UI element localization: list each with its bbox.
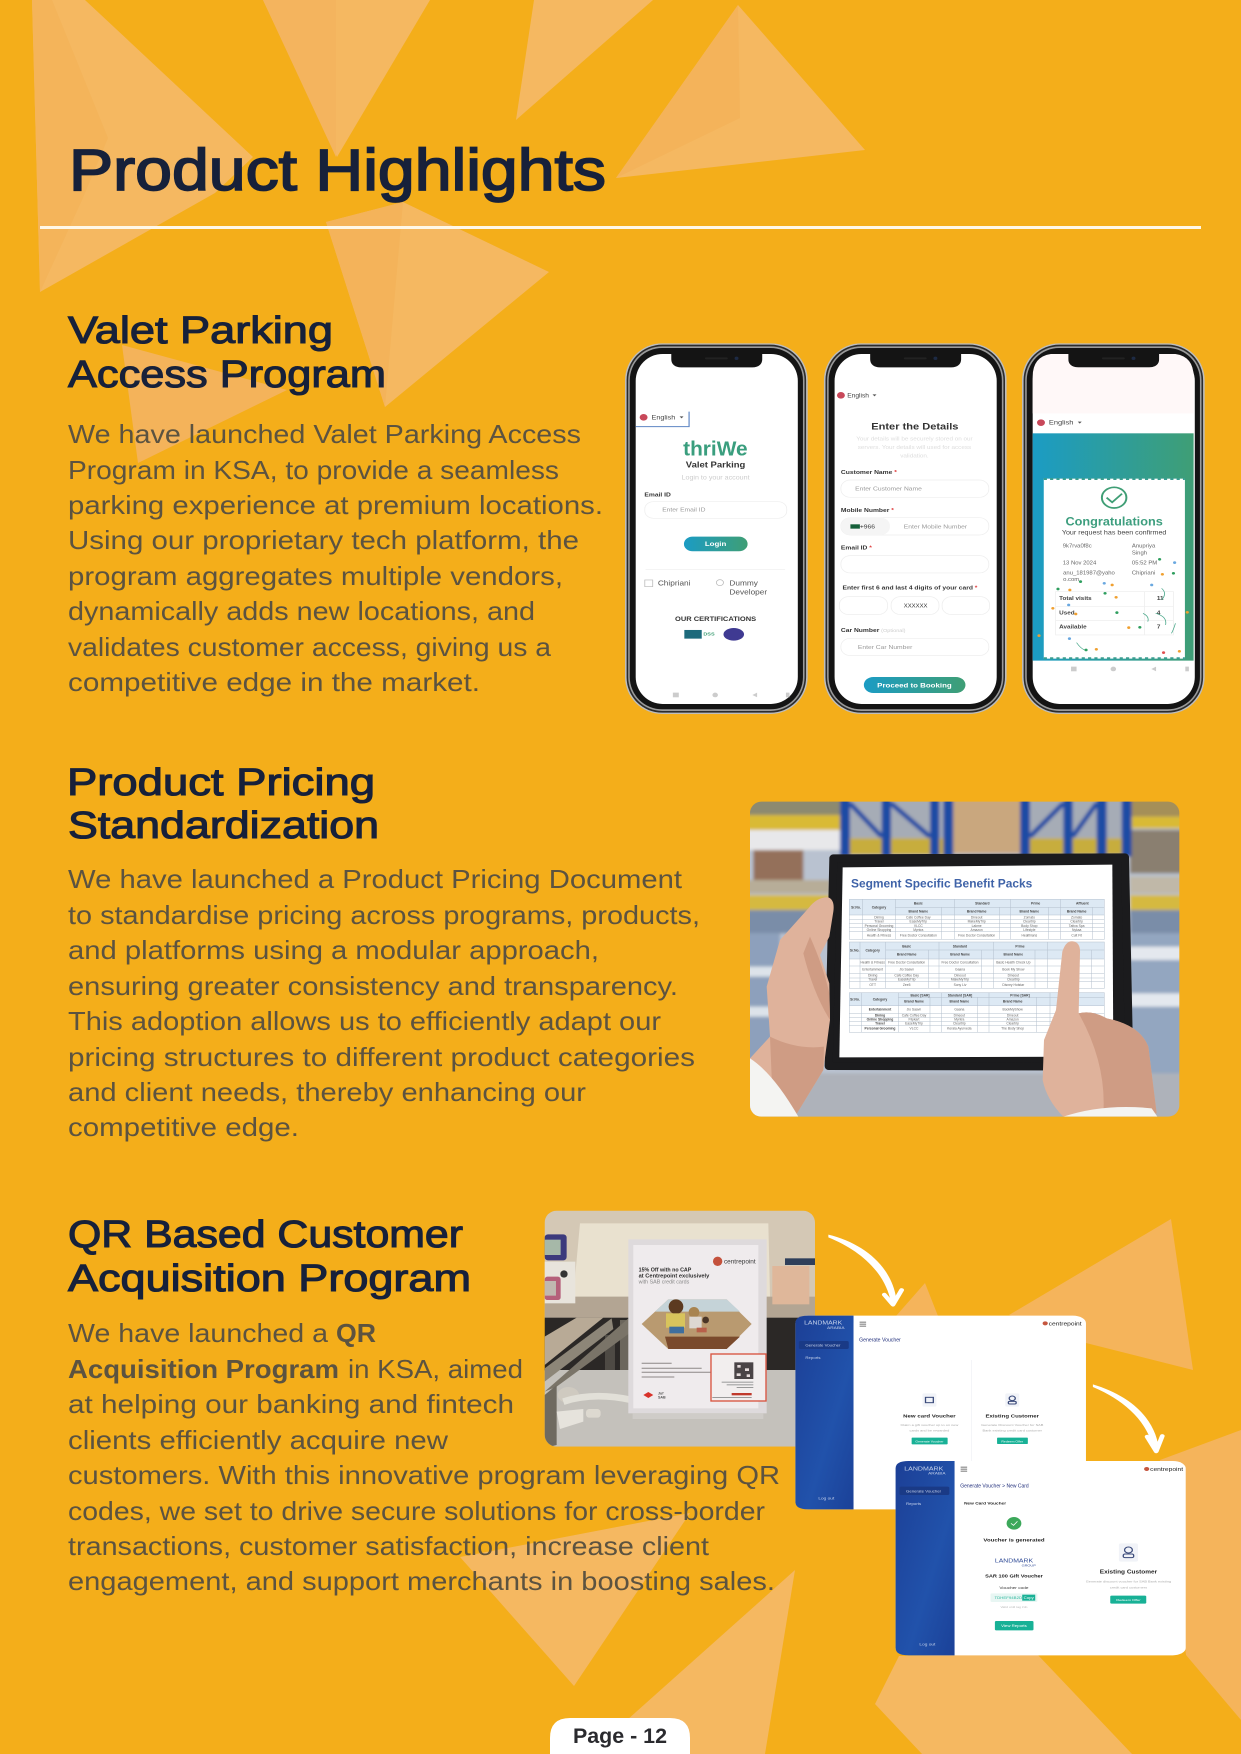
- pricing table 3: Basic [SAR]: [910, 993, 930, 997]
- pricing table 1: Online Shopping: [867, 928, 891, 932]
- pricing table 2: Brand Name: [897, 953, 917, 957]
- heading: pricing: Standardization: [68, 805, 379, 847]
- pricing table 1: Affluent: [1076, 901, 1090, 905]
- QR code callout: [711, 1354, 766, 1401]
- body text: valet parking: [68, 419, 603, 697]
- page number pill: Page - 12: [573, 1725, 667, 1748]
- photo: QR standee in store: with SAB credit cards: [639, 1279, 690, 1285]
- phone 2: enter details form: Email ID *: [841, 545, 872, 551]
- left hand: [750, 897, 834, 1117]
- heading: pricing: [67, 762, 379, 847]
- card: new card voucher: Claim a gift voucher up to on new: [901, 1423, 959, 1427]
- pricing table 1: Travel: [874, 920, 884, 924]
- card: new card voucher: Generate Voucher: [915, 1440, 943, 1443]
- confirmation ticket: anu_181987@yaho: [1063, 571, 1115, 576]
- body text: pricing: [68, 864, 700, 1142]
- pricing table 3: Brand Name: [950, 1000, 969, 1004]
- phone 2: enter details form: servers. Your details will used for access: [858, 445, 971, 451]
- pricing table 3: Brand Name: [1003, 1000, 1023, 1004]
- heading: valet parking: Access Program: [68, 354, 386, 396]
- phone 2: enter details form: Enter Customer Name: [855, 486, 922, 492]
- pricing table 1: Dineout: [971, 916, 982, 920]
- pricing table 2: Standard: [953, 944, 967, 948]
- pricing table 1: Cleartrip: [1023, 920, 1036, 924]
- phone 2: enter details form: Your details will be securely stored on our: [856, 437, 973, 442]
- body text: pricing: competitive edge.: [68, 1112, 299, 1142]
- app window: generate voucher: Generate Voucher: [805, 1344, 841, 1347]
- confirmation ticket: o.com: [1063, 577, 1080, 583]
- card: existing customer: [981, 1393, 1044, 1444]
- phone 1: login: [625, 343, 808, 714]
- confirmation ticket: 05:52 PM: [1132, 561, 1158, 566]
- body text: valet parking: We have launched Valet Parking Access: [68, 419, 581, 449]
- existing customer option: Redeem Offer: [1116, 1598, 1142, 1602]
- app window: generate voucher: LANDMARK: [804, 1320, 843, 1326]
- voucher result: TDHEF94B2D: [994, 1596, 1022, 1600]
- pricing table 1: Prime: [1031, 901, 1040, 905]
- app window: voucher generated: ARABIA: [928, 1471, 946, 1476]
- pricing table 1: Zomato: [1024, 916, 1035, 920]
- body text: QR: engagement, and support merchants in boosting sales.: [68, 1566, 775, 1596]
- pricing table 1: Brand Name: [909, 910, 928, 914]
- body text: pricing: to standardise pricing across programs, products,: [68, 900, 700, 930]
- body text: QR: clients efficiently acquire new: [68, 1425, 448, 1455]
- pricing table 3: Brand Name: [904, 1000, 924, 1004]
- phone 1: login: Chipriani: [658, 579, 691, 587]
- pricing table 1: Free Doctor Consultation: [900, 934, 937, 938]
- pricing table 1: Brand Name: [967, 910, 987, 914]
- arrow: photo to voucher screen: [828, 1235, 902, 1305]
- phone 1: login: Valet Parking: [686, 460, 745, 469]
- pricing table 1: Lakme: [972, 924, 982, 928]
- pricing table 1: Lifestyle: [1023, 928, 1036, 932]
- pricing table 1: Brand Name: [1067, 910, 1087, 914]
- pricing table 3: [849, 993, 1104, 1032]
- pricing table 3: Dineout: [1007, 1013, 1018, 1017]
- QR program visuals: [545, 1211, 1186, 1655]
- pricing table 2: Disney Hotstar: [1002, 983, 1025, 987]
- confirmation ticket: 11: [1157, 596, 1164, 602]
- phone 1: login: Login to your account: [682, 475, 750, 481]
- phone 2: enter details form: Enter first 6 and last 4 digits of your card *: [842, 585, 978, 591]
- app window: voucher generated: Reports: [906, 1502, 921, 1506]
- pricing table 2: Health & Fitness: [860, 960, 885, 964]
- existing customer option: [1086, 1543, 1171, 1604]
- app window: generate voucher: [795, 1316, 1086, 1509]
- confirmation ticket: Total visits: [1059, 596, 1093, 602]
- tablet device: [829, 857, 1129, 1067]
- pricing table 2: Gaana: [955, 968, 965, 972]
- heading: QR: [68, 1214, 471, 1300]
- body text: QR: [68, 1318, 780, 1596]
- pricing table 1: Body Shop: [1021, 924, 1038, 928]
- pricing table 2: Category: [865, 948, 880, 952]
- body text: valet parking: program aggregates multiple vendors,: [68, 561, 563, 591]
- pricing table 3: Prime [SAR]: [1010, 993, 1030, 997]
- confirmation ticket: Your request has been confirmed: [1062, 530, 1167, 536]
- pricing table 1: [849, 899, 1104, 939]
- pricing table 1: Zomato: [1071, 916, 1082, 920]
- app window: voucher generated: LANDMARK: [904, 1466, 944, 1472]
- body text: QR: codes, we set to drive secure solutions for cross-border: [68, 1496, 765, 1526]
- pricing table 1: Free Doctor Consultation: [958, 934, 995, 938]
- voucher result: Valid until tag info: [1000, 1605, 1028, 1609]
- section: pricing text: [67, 762, 700, 1142]
- card: existing customer: Existing Customer: [985, 1414, 1040, 1419]
- confirmation ticket: 4: [1157, 611, 1161, 616]
- body text: pricing: ensuring greater consistency and transparency.: [68, 971, 678, 1001]
- photo: QR standee in store: at Centrepoint exclusively: [639, 1274, 709, 1280]
- pricing table 3: Cleartrip: [1006, 1021, 1019, 1025]
- phone 2: enter details form: Mobile Number *: [841, 507, 894, 514]
- body text: valet parking: competitive edge in the market.: [68, 667, 480, 697]
- pricing table 3: BookMyShow: [1002, 1007, 1023, 1011]
- voucher result: View Reports: [1001, 1624, 1027, 1628]
- pricing table 1: Myntra: [913, 928, 924, 932]
- pricing table 2: Jio Saavn: [899, 968, 914, 972]
- pricing table 2: Basic Health Check Up: [996, 960, 1031, 964]
- title rule: [40, 226, 1201, 229]
- card: new card voucher: [901, 1393, 959, 1444]
- warehouse background: [743, 797, 1187, 1123]
- pricing table 2: Zee5: [903, 983, 911, 987]
- pricing table 2: Sony Liv: [954, 983, 967, 987]
- pricing table 3: Flipkart: [909, 1017, 920, 1021]
- phone mockups: [625, 343, 1205, 714]
- body text: QR: QR: [336, 1318, 376, 1348]
- body text: pricing: This adoption allows us to efficiently adapt our: [68, 1006, 661, 1036]
- confirmation ticket: Congratulations: [1066, 514, 1163, 528]
- body text: QR: transactions, customer satisfaction, increase client: [68, 1531, 710, 1561]
- heading: QR: Acquisition Program: [68, 1258, 471, 1300]
- phone 1: login: Login: [705, 540, 726, 548]
- title: Product Highlights: [69, 138, 606, 203]
- pricing table 2: MakeMyTrip: [951, 978, 969, 982]
- pricing table 2: Cleartrip: [1007, 978, 1020, 982]
- pricing table 1: Healthians: [1021, 934, 1038, 938]
- photo: QR standee in store: SAB: [658, 1395, 666, 1399]
- phone 1: login: OUR CERTIFICATIONS: [675, 616, 757, 623]
- confirmation ticket: Available: [1059, 625, 1087, 630]
- pricing table 2: Book My Show: [1002, 968, 1025, 972]
- phone 2: enter details form: Enter Mobile Number: [904, 524, 967, 530]
- pricing table 1: Sr.No.: [851, 906, 861, 910]
- heading: valet parking: Valet Parking: [68, 310, 333, 352]
- pricing table 1: Cafe Coffee Day: [906, 916, 931, 920]
- confirmation ticket: [1037, 479, 1189, 659]
- pricing table 2: Dining: [868, 974, 878, 978]
- pricing table 1: Brand Name: [1020, 910, 1039, 914]
- app window: voucher generated: Generate Voucher: [906, 1490, 942, 1493]
- phone 1: login: Dummy: [729, 579, 758, 587]
- body text: QR: at helping our banking and fintech: [68, 1389, 514, 1419]
- body text: QR: customers. With this innovative program leveraging QR: [68, 1460, 780, 1490]
- existing customer option: Existing Customer: [1100, 1570, 1158, 1575]
- pricing table 1: Dining: [874, 916, 884, 920]
- phone 2: enter details form: Car Number (Optional): [841, 627, 906, 634]
- app window: generate voucher: centrepoint: [1049, 1321, 1082, 1327]
- pricing table 2: Travel: [868, 978, 877, 982]
- body text: pricing: We have launched a Product Pricing Document: [68, 864, 683, 894]
- pricing table 3: Category: [873, 997, 887, 1001]
- pricing table 2: [849, 942, 1104, 988]
- confirmation ticket: 7: [1157, 625, 1160, 630]
- pricing table 3: Personal Grooming: [865, 1027, 895, 1031]
- pricing table 1: MakeMyTrip: [968, 920, 986, 924]
- app window: generate voucher: Generate Voucher: [859, 1338, 901, 1343]
- voucher result: Voucher code: [999, 1586, 1029, 1590]
- pricing table 3: Entertainment: [869, 1007, 892, 1011]
- pricing table 2: Brand Name: [1004, 953, 1023, 957]
- pricing table 1: Health & Fitness: [867, 934, 892, 938]
- pricing table 2: Sr.No.: [850, 948, 860, 952]
- voucher result: Voucher is generated: [983, 1538, 1045, 1543]
- body text: valet parking: validates customer access, giving us a: [68, 632, 552, 662]
- pricing table 1: VLCC: [914, 924, 923, 928]
- pricing table 1: Standard: [975, 901, 990, 905]
- voucher result: Copy: [1024, 1596, 1034, 1600]
- phone 1: login: Enter Email ID: [662, 507, 706, 513]
- phone 2: enter details form: Customer Name *: [841, 469, 897, 476]
- body text: valet parking: parking experience at premium locations.: [68, 490, 603, 520]
- photo: QR standee in store: Juf: [658, 1391, 664, 1395]
- pricing table 2: Dineout: [954, 974, 966, 978]
- app window: voucher generated: New Card Voucher: [964, 1501, 1007, 1505]
- section: QR text: [68, 1214, 780, 1596]
- phone 1: login: thriWe: [683, 437, 748, 460]
- confetti: [1037, 558, 1189, 654]
- body text: pricing: and platforms using a modular approach,: [68, 935, 599, 965]
- body text: pricing: pricing structures to different product categories: [68, 1042, 695, 1072]
- photo: QR standee in store: [545, 1211, 815, 1447]
- right hand pointing: [1043, 941, 1157, 1117]
- card: existing customer: Redeem Offer: [1001, 1440, 1023, 1443]
- card: new card voucher: cards and be rewarded: [910, 1429, 949, 1433]
- heading: QR: QR Based Customer: [68, 1214, 463, 1256]
- pricing table 3: Dineout: [954, 1013, 965, 1017]
- voucher result: GROUP: [1022, 1564, 1037, 1567]
- pricing table 1: Category: [872, 906, 886, 910]
- body text: valet parking: dynamically adds new locations, and: [68, 596, 535, 626]
- arrow: voucher screen to result screen: [1093, 1384, 1162, 1451]
- app window: voucher generated: Generate Voucher > New Card: [960, 1484, 1029, 1489]
- confirmation ticket: 9k7rva0f8c: [1063, 544, 1092, 549]
- phone 2: enter details form: XXXXXX: [904, 604, 928, 609]
- body text: valet parking: Program in KSA, to provide a seamless: [68, 455, 559, 485]
- card: existing customer: Bank existing credit card customer: [983, 1429, 1043, 1433]
- pricing table 3: Amazon: [1007, 1017, 1019, 1021]
- confirmation ticket: Chipriani: [1132, 571, 1155, 576]
- phone 1: login: DSS: [703, 632, 715, 637]
- pricing table 1: Cult Fit: [1071, 934, 1082, 938]
- card: new card voucher: New card Voucher: [903, 1414, 957, 1419]
- pricing table 3: Jio Saavn: [907, 1007, 921, 1011]
- app window: voucher generated: centrepoint: [1150, 1467, 1183, 1473]
- photo: QR standee in store: centrepoint: [724, 1259, 756, 1266]
- pricing table 3: Standard [SAR]: [948, 993, 972, 997]
- voucher result: LANDMARK: [995, 1558, 1034, 1564]
- phone 2: enter details form: English: [847, 391, 869, 399]
- body text: pricing: and client needs, thereby enhancing our: [68, 1077, 586, 1107]
- pricing table 3: Online Shopping: [867, 1017, 893, 1021]
- pricing table 1: Cleartrip: [1070, 920, 1083, 924]
- pricing table 2: Prime: [1015, 944, 1025, 948]
- pricing table 1: Tattva Spa: [1069, 924, 1085, 928]
- phone 2: enter details form: +966: [860, 524, 876, 530]
- photo: QR standee in store: 15% Off with no CAP: [639, 1268, 692, 1274]
- app window: generate voucher: Reports: [805, 1356, 821, 1360]
- pricing table 3: Dining: [875, 1013, 885, 1017]
- phone 2: enter details form: validation.: [900, 454, 929, 459]
- phone 1: login: Developer: [729, 588, 768, 596]
- voucher result: [983, 1517, 1045, 1630]
- tablet photo: [743, 797, 1187, 1123]
- pricing table 2: Cafe Coffee Day: [894, 974, 919, 978]
- app window: generate voucher: ARABIA: [827, 1326, 845, 1330]
- existing customer option: Generate discount voucher for SAB Bank existing: [1086, 1580, 1171, 1584]
- app window: voucher generated: Log out: [919, 1642, 936, 1647]
- phone 2: enter details form: [824, 343, 1007, 714]
- pricing table 3: Kerala Ayurveda: [947, 1027, 972, 1031]
- pricing table 3: EaseMyTrip: [905, 1021, 923, 1025]
- pricing table 3: Sr.No.: [850, 997, 860, 1001]
- confirmation ticket: 13 Nov 2024: [1063, 561, 1096, 566]
- voucher result: SAR 100 Gift Voucher: [985, 1574, 1043, 1579]
- phone 2: enter details form: Enter the Details: [871, 422, 959, 432]
- pricing table 2: Free Doctor Consultation: [941, 960, 979, 964]
- pricing table 3: Cleartrip: [953, 1021, 966, 1025]
- pricing table 3: Travel: [875, 1021, 885, 1025]
- heading: pricing: Product Pricing: [67, 762, 375, 804]
- card: existing customer: Generate Discount Voucher for SAB: [981, 1423, 1044, 1427]
- pricing table 2: Brand Name: [950, 953, 970, 957]
- confirmation ticket: Anupriya: [1132, 544, 1156, 549]
- app window: voucher generated: [896, 1461, 1186, 1655]
- pricing table 1: Basic: [914, 901, 923, 905]
- body text: QR: in KSA, aimed: [348, 1354, 523, 1384]
- page number pill: [550, 1718, 690, 1754]
- pricing table 2: Dineout: [1008, 974, 1019, 978]
- section: valet parking text: [68, 310, 603, 697]
- heading: valet parking: [68, 310, 386, 396]
- pricing table 2: OTT: [869, 983, 876, 987]
- pricing table 2: Basic: [902, 944, 911, 948]
- existing customer option: credit card customers: [1110, 1586, 1147, 1589]
- app window: generate voucher: Log out: [818, 1496, 835, 1501]
- body text: QR: We have launched a: [68, 1318, 329, 1348]
- phone 3: confirmation: [1022, 343, 1205, 714]
- pricing table 3: Myntra: [954, 1017, 965, 1021]
- pricing table 1: Personal Grooming: [865, 924, 893, 928]
- pricing table 3: VLCC: [910, 1027, 919, 1031]
- phone 1: login: Email ID: [644, 492, 671, 498]
- pricing table 1: EaseMyTrip: [910, 920, 927, 924]
- body text: QR: Acquisition Program: [68, 1354, 339, 1384]
- phone 2: enter details form: Enter Car Number: [858, 644, 912, 651]
- phone 2: enter details form: Proceed to Booking: [877, 681, 952, 689]
- phone 1: login: English: [652, 413, 675, 421]
- pricing table 3: Cafe Coffee Day: [902, 1013, 927, 1017]
- pricing table 1: Amazon: [971, 928, 983, 932]
- pricing table 2: Entertainment: [862, 968, 883, 972]
- pricing table 2: EaseMyTrip: [898, 978, 916, 982]
- pricing table 1: Nykaa: [1072, 928, 1082, 932]
- body text: valet parking: Using our proprietary tech platform, the: [68, 525, 579, 555]
- pricing table 3: Gaana: [954, 1007, 964, 1011]
- tablet device: Segment Specific Benefit Packs: [851, 876, 1033, 890]
- confirmation ticket: Used: [1059, 611, 1075, 616]
- pricing table 3: The Body Shop: [1001, 1027, 1024, 1031]
- pricing table 2: Free Doctor Consultation: [888, 960, 925, 964]
- confirmation ticket: Singh: [1132, 551, 1147, 556]
- phone 3: confirmation: English: [1049, 418, 1073, 426]
